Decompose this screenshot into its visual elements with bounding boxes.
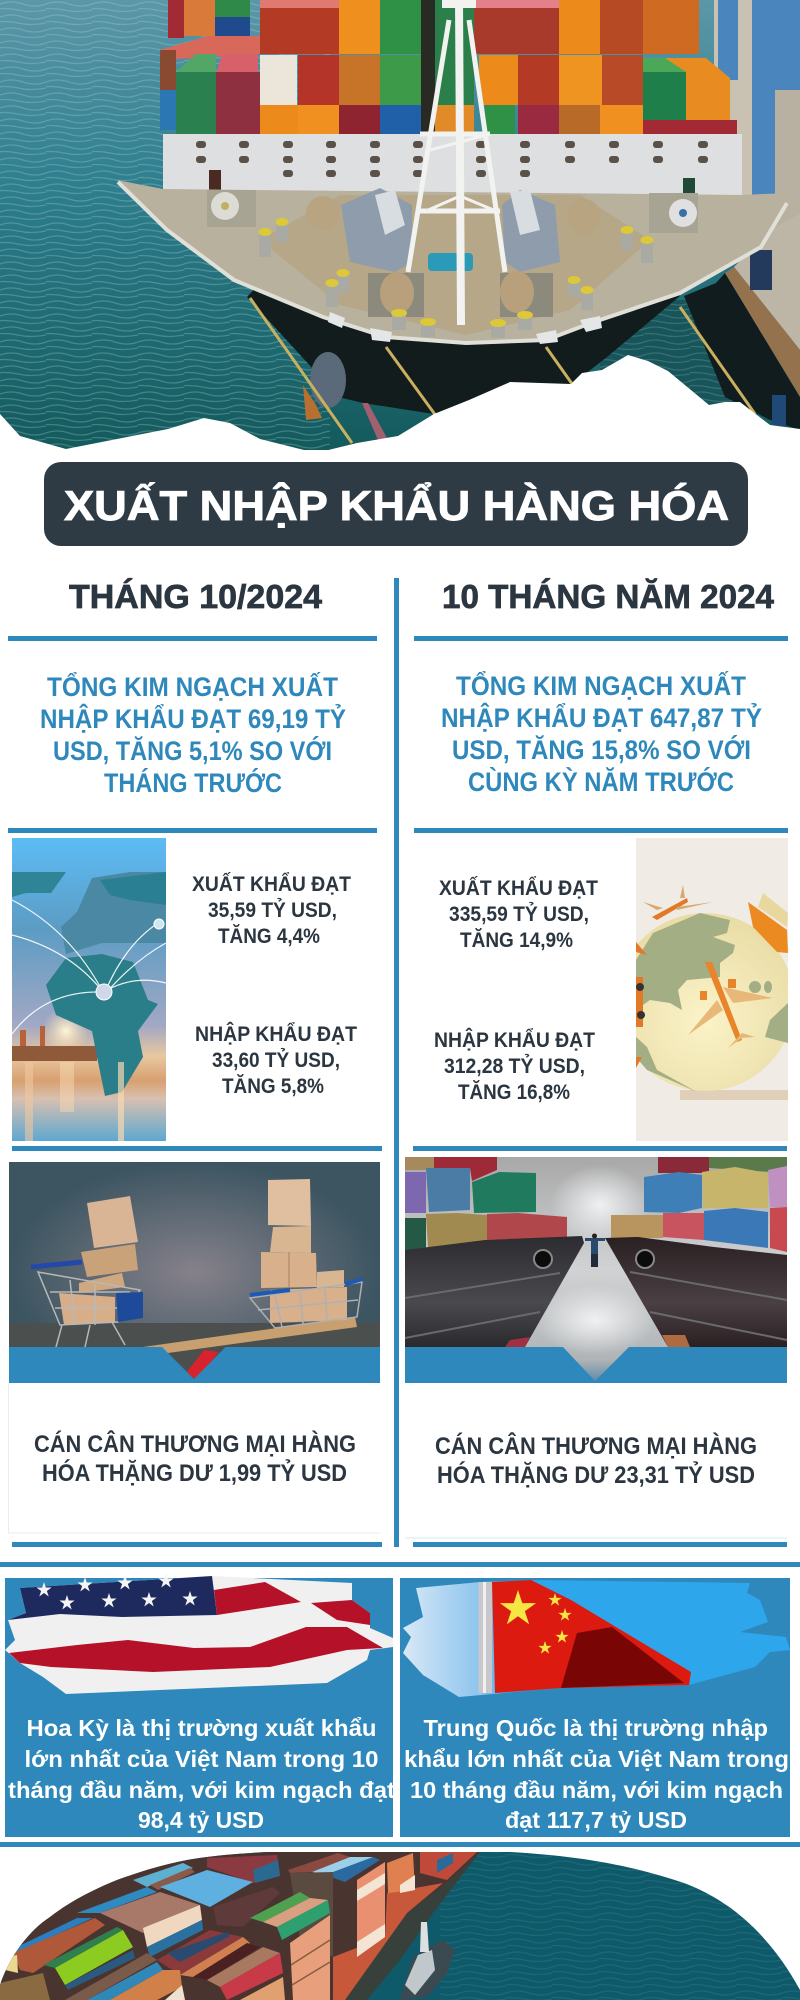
seesaw plank bbox=[143, 1317, 357, 1353]
text: ten-month exports and imports: 335,59 TỶ USD, bbox=[449, 903, 589, 926]
text: ten-month exports and imports bbox=[434, 877, 598, 1104]
column heading: month: THÁNG 10/2024 bbox=[69, 578, 323, 615]
full-width rules bbox=[0, 1562, 800, 1847]
text: monthly exports and imports: TĂNG 5,8% bbox=[222, 1075, 324, 1098]
image: two container ships and man bbox=[405, 1157, 787, 1382]
text: USA: 98,4 tỷ USD bbox=[138, 1807, 264, 1833]
text: total trade, ten months: TỔNG KIM NGẠCH XUẤT bbox=[456, 670, 746, 701]
deck bbox=[117, 180, 787, 343]
text: ten-month exports and imports: TĂNG 14,9% bbox=[460, 929, 573, 952]
panel: USA export market bbox=[5, 1573, 395, 1837]
text: China: đạt 117,7 tỷ USD bbox=[505, 1807, 687, 1833]
text: USA bbox=[8, 1715, 395, 1833]
rules under headings bbox=[8, 636, 788, 1547]
quay and crane bbox=[684, 0, 800, 430]
image: globe and planes bbox=[636, 838, 788, 1141]
mooring ropes bbox=[250, 298, 755, 443]
photo: container ship bow bbox=[0, 0, 800, 450]
text: total trade, ten months bbox=[441, 670, 762, 797]
text: trade balance, ten months: CÁN CÂN THƯƠNG MẠI HÀNG bbox=[435, 1432, 757, 1460]
text: total trade, month: TỔNG KIM NGẠCH XUẤT bbox=[47, 671, 338, 702]
text: total trade, ten months: NHẬP KHẨU ĐẠT 647,87 TỶ bbox=[441, 701, 762, 733]
text: USA: Hoa Kỳ là thị trường xuất khẩu bbox=[26, 1715, 376, 1741]
basket bbox=[250, 1279, 363, 1328]
centre divider bbox=[394, 578, 399, 1547]
column heading: ten months: 10 THÁNG NĂM 2024 bbox=[442, 578, 775, 615]
icon: US flag bbox=[5, 1573, 393, 1694]
text: ten-month exports and imports: NHẬP KHẨU ĐẠT bbox=[434, 1028, 595, 1052]
shopping cart bbox=[31, 1262, 143, 1347]
superstructure wall bbox=[163, 134, 742, 196]
text: trade balance, month bbox=[34, 1430, 356, 1487]
blue bands with notches bbox=[9, 1347, 787, 1383]
ship mast bbox=[408, 0, 505, 325]
torn paper edge bbox=[0, 355, 800, 470]
basket boxes bbox=[261, 1179, 347, 1323]
text: monthly exports and imports: 33,60 TỶ USD, bbox=[212, 1049, 340, 1072]
icon: China flag bbox=[403, 1580, 790, 1697]
text: total trade, ten months: USD, TĂNG 15,8% SO VỚI bbox=[452, 734, 751, 765]
text: China: khẩu lớn nhất của Việt Nam trong bbox=[404, 1746, 789, 1772]
text: trade balance, month: HÓA THẶNG DƯ 1,99 TỶ USD bbox=[42, 1458, 347, 1487]
red pivot bbox=[186, 1350, 219, 1379]
photo: aerial container ship bbox=[0, 1850, 800, 2000]
image: world map and port bbox=[12, 838, 166, 1141]
title banner: XUẤT NHẬP KHẨU HÀNG HÓA bbox=[64, 481, 729, 529]
man bridging the ships bbox=[585, 1234, 605, 1267]
text: total trade, month bbox=[40, 671, 346, 798]
text: total trade, month: USD, TĂNG 5,1% SO VỚI bbox=[53, 735, 332, 766]
text: China: Trung Quốc là thị trường nhập bbox=[424, 1715, 768, 1741]
image: shopping cart and basket on seesaw bbox=[9, 1162, 380, 1382]
text: China: 10 tháng đầu năm, với kim ngạch bbox=[410, 1777, 783, 1803]
cart boxes bbox=[59, 1196, 138, 1325]
right containers bbox=[611, 1157, 787, 1252]
containers bbox=[160, 0, 737, 134]
text: trade balance, ten months bbox=[435, 1432, 757, 1489]
text: total trade, ten months: CÙNG KỲ NĂM TRƯỚC bbox=[468, 766, 734, 797]
text: trade balance, month: CÁN CÂN THƯƠNG MẠI HÀNG bbox=[34, 1430, 356, 1458]
faint box outlines bbox=[8, 1383, 787, 1538]
text: total trade, month: NHẬP KHẨU ĐẠT 69,19 TỶ bbox=[40, 702, 346, 734]
deck machinery bbox=[207, 188, 698, 344]
text: China bbox=[404, 1715, 789, 1833]
text: monthly exports and imports: 35,59 TỶ USD, bbox=[208, 899, 337, 922]
text: total trade, month: THÁNG TRƯỚC bbox=[104, 767, 282, 798]
left containers bbox=[405, 1157, 567, 1252]
ship hulls bbox=[405, 1236, 787, 1347]
text: monthly exports and imports: TĂNG 4,4% bbox=[218, 925, 320, 948]
text: trade balance, ten months: HÓA THẶNG DƯ 23,31 TỶ USD bbox=[437, 1460, 755, 1489]
text: USA: tháng đầu năm, với kim ngạch đạt bbox=[8, 1777, 395, 1803]
tugboat bbox=[400, 1922, 455, 2000]
ship deck and containers bbox=[0, 1850, 480, 2000]
text: monthly exports and imports: NHẬP KHẨU ĐẠT bbox=[195, 1022, 357, 1046]
title banner bbox=[44, 462, 748, 546]
text: monthly exports and imports bbox=[192, 873, 357, 1098]
text: ten-month exports and imports: TĂNG 16,8% bbox=[458, 1081, 570, 1104]
text: USA: lớn nhất của Việt Nam trong 10 bbox=[24, 1746, 378, 1772]
text: ten-month exports and imports: XUẤT KHẨU ĐẠT bbox=[439, 877, 598, 900]
hull bbox=[247, 240, 680, 440]
text: monthly exports and imports: XUẤT KHẨU ĐẠT bbox=[192, 873, 351, 896]
text: ten-month exports and imports: 312,28 TỶ USD, bbox=[444, 1055, 585, 1078]
panel: China import market bbox=[400, 1578, 790, 1837]
